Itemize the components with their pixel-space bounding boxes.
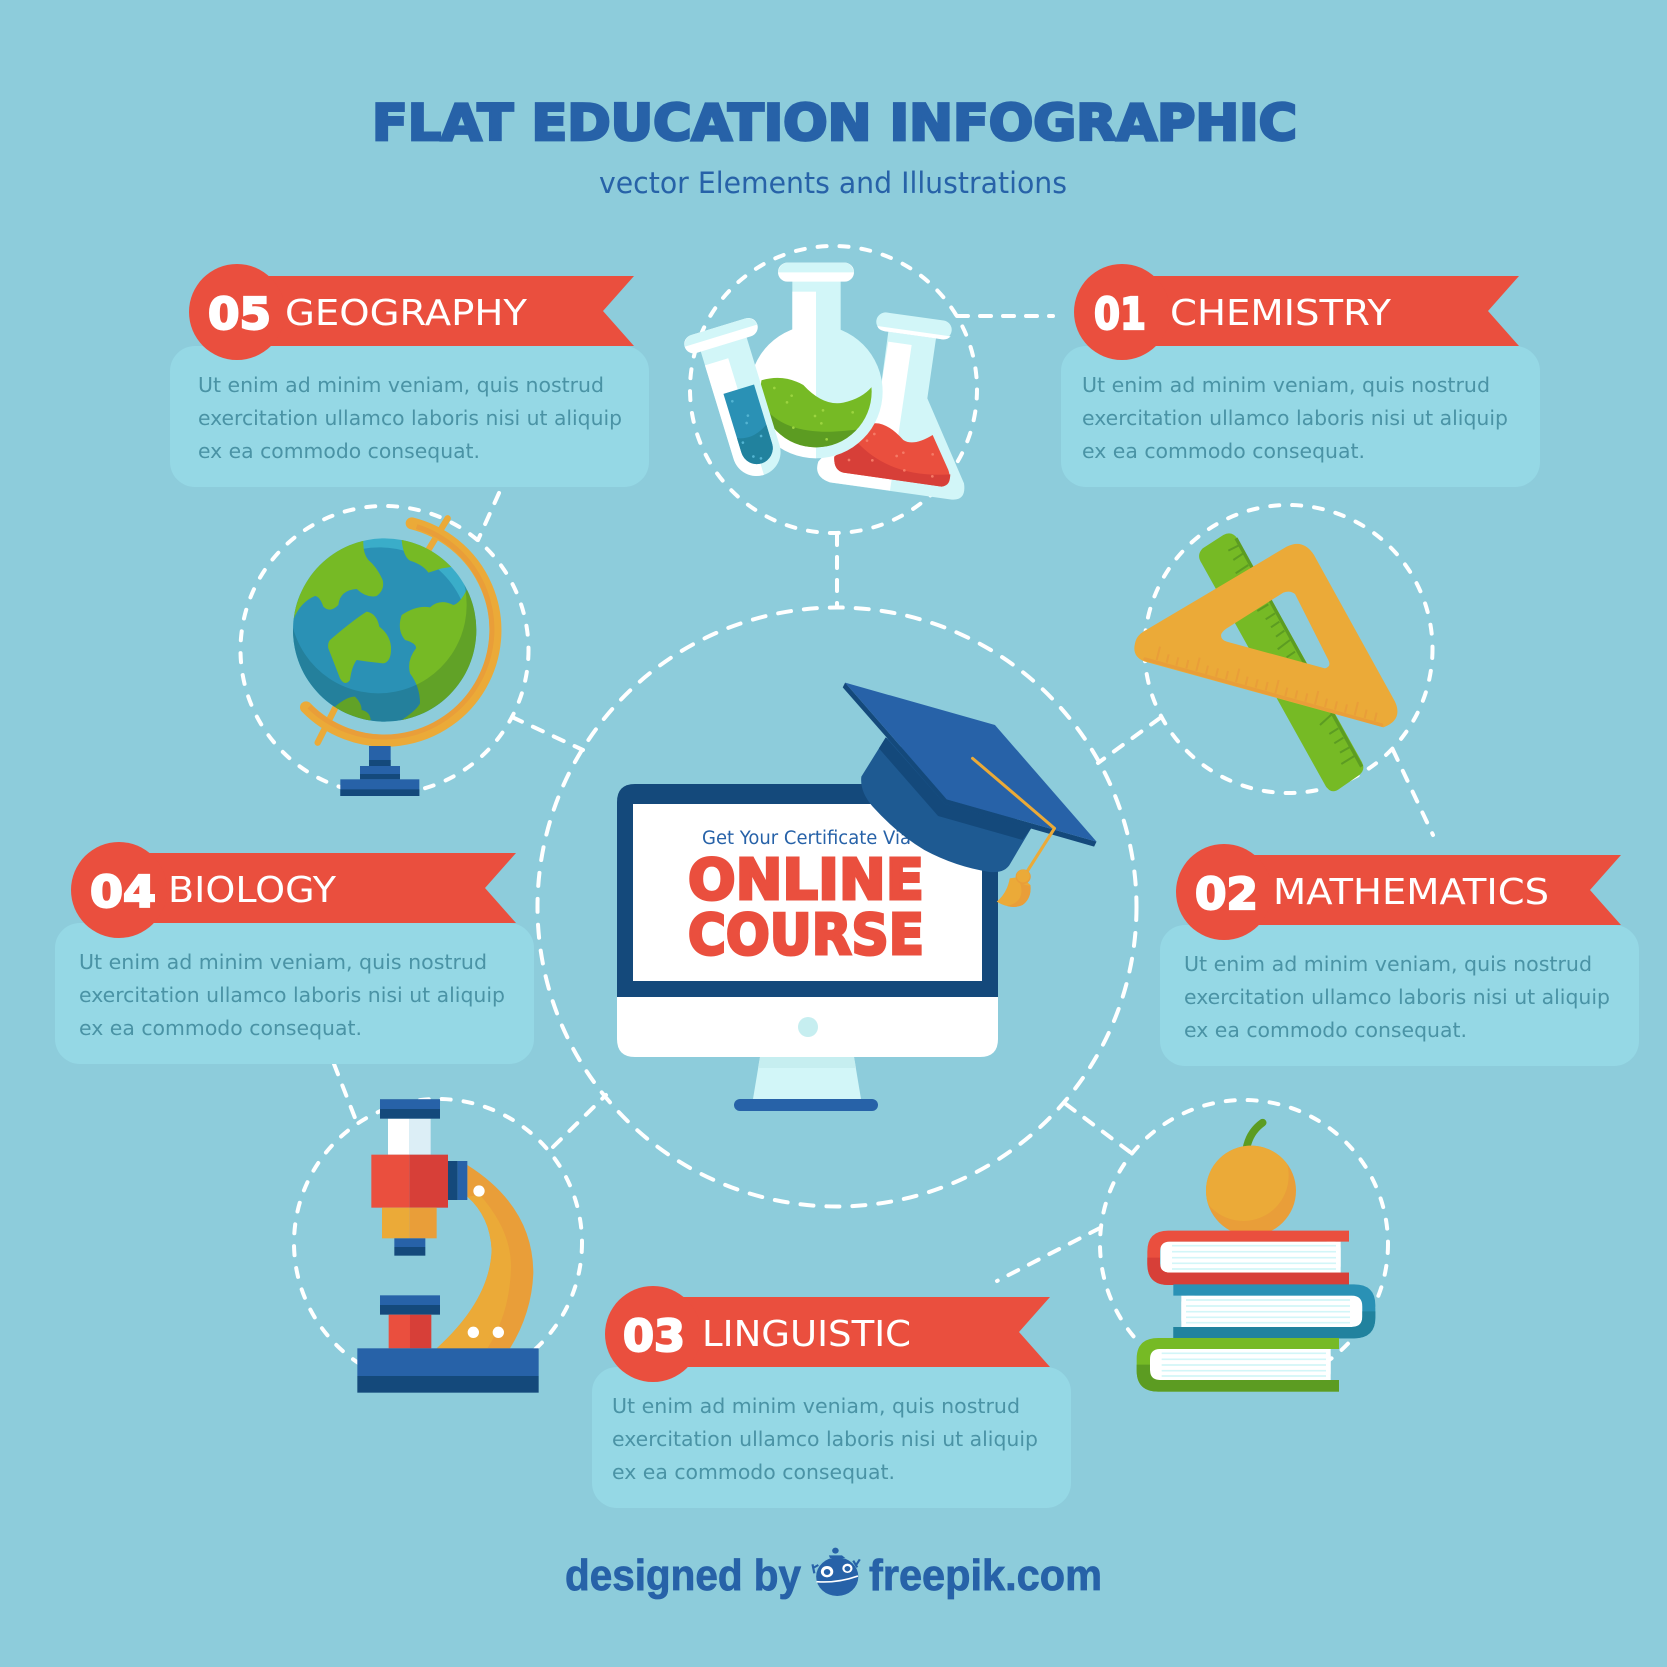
panel: 04 biology [55, 842, 534, 1064]
icon: ruler and set square [1134, 533, 1397, 791]
body text: exercitation ullamco laboris nisi ut aliquip [612, 1427, 1038, 1451]
number badge [71, 842, 167, 938]
chemistry dashed circle [690, 246, 977, 533]
test tube [682, 316, 800, 486]
globe sphere [293, 538, 476, 722]
number badge [189, 264, 285, 360]
heading: LINGUISTIC [702, 1314, 911, 1355]
number badge [605, 1286, 701, 1382]
icon: globe [270, 517, 495, 796]
number: 02 [1195, 869, 1258, 920]
round flask [749, 263, 883, 460]
body text: Ut enim ad minim veniam, quis nostrud [1082, 373, 1490, 397]
heading: CHEMISTRY [1170, 293, 1392, 334]
subtitle: vector Elements and Illustrations [599, 166, 1067, 200]
description card [55, 923, 534, 1064]
body text: ex ea commodo consequat. [198, 439, 480, 463]
linguistic dashed circle [1100, 1100, 1388, 1388]
heading: GEOGRAPHY [285, 293, 528, 334]
ribbon [653, 1297, 1050, 1367]
screen headline line 2: COURSE [688, 903, 924, 968]
microscope eyepiece [380, 1099, 440, 1155]
number: 04 [90, 867, 156, 918]
body text: exercitation ullamco laboris nisi ut aliquip [79, 983, 505, 1007]
number: 05 [208, 289, 271, 340]
globe axis [318, 518, 448, 743]
panel: 03 linguistic [592, 1286, 1071, 1508]
microscope body [371, 1155, 467, 1256]
icon: books and apple [1137, 1123, 1375, 1392]
description card [1160, 925, 1639, 1066]
monitor chin [617, 997, 998, 1057]
ribbon [237, 276, 634, 346]
monitor frame [617, 784, 998, 997]
body text [1184, 952, 1610, 1042]
monitor [617, 784, 998, 1111]
footer credit [565, 1548, 1102, 1600]
number: 03 [623, 1311, 685, 1362]
cap skull [861, 737, 1031, 872]
body text: Ut enim ad minim veniam, quis nostrud [198, 373, 604, 397]
screen small text: Get Your Certificate Via [702, 828, 911, 849]
ribbon [1224, 855, 1621, 925]
number badge [1074, 264, 1170, 360]
number badge [1176, 844, 1272, 940]
body text [612, 1394, 1038, 1484]
green ruler [1199, 533, 1363, 791]
geography dashed circle [240, 506, 528, 794]
icon: freepik mascot [813, 1548, 860, 1596]
body text [79, 950, 505, 1040]
title: FLAT EDUCATION INFOGRAPHIC [372, 94, 1297, 152]
ribbon [1122, 276, 1519, 346]
panel: 05 geography [170, 264, 649, 487]
body text [198, 373, 622, 463]
body text: exercitation ullamco laboris nisi ut aliquip [1184, 985, 1610, 1009]
icon: chemistry flasks [682, 263, 964, 500]
body text [1082, 373, 1508, 463]
body text: Ut enim ad minim veniam, quis nostrud [612, 1394, 1020, 1418]
ribbon [119, 853, 516, 923]
blue book [1173, 1284, 1375, 1338]
monitor stand [753, 1057, 861, 1099]
cap board [843, 683, 1097, 847]
heading: BIOLOGY [168, 870, 337, 911]
monitor button [798, 1017, 818, 1037]
cap tassel [973, 758, 1055, 907]
globe ring [306, 523, 495, 741]
green book [1137, 1338, 1339, 1392]
credit text left: designed by [565, 1551, 801, 1600]
body text: ex ea commodo consequat. [612, 1460, 895, 1484]
icon: graduation cap [843, 683, 1097, 907]
dashed connectors [334, 316, 1433, 1281]
monitor screen [633, 804, 982, 981]
globe stand [340, 746, 419, 796]
body text: Ut enim ad minim veniam, quis nostrud [79, 950, 487, 974]
apple [1198, 1123, 1296, 1236]
body text: exercitation ullamco laboris nisi ut aliquip [1082, 406, 1508, 430]
body text: exercitation ullamco laboris nisi ut aliquip [198, 406, 622, 430]
panel: 01 chemistry [1061, 264, 1540, 487]
description card [170, 346, 649, 487]
description card [592, 1367, 1071, 1508]
credit text right: freepik.com [869, 1551, 1102, 1600]
description card [1061, 346, 1540, 487]
conical flask [817, 311, 964, 500]
mathematics dashed circle [1144, 505, 1432, 793]
orange set square [1134, 544, 1397, 727]
body text: ex ea commodo consequat. [79, 1016, 362, 1040]
central dashed circle [538, 608, 1136, 1206]
microscope arm [437, 1165, 533, 1348]
body text: ex ea commodo consequat. [1184, 1018, 1467, 1042]
biology dashed circle [294, 1099, 582, 1387]
panel: 02 mathematics [1160, 844, 1639, 1066]
icon: microscope [357, 1099, 539, 1393]
cap shadow band [879, 737, 1031, 840]
heading: MATHEMATICS [1273, 872, 1549, 913]
screen headline: ONLINE [688, 848, 924, 913]
red book [1147, 1231, 1349, 1285]
body text: Ut enim ad minim veniam, quis nostrud [1184, 952, 1592, 976]
microscope stage and base [357, 1295, 539, 1393]
number: 01 [1094, 289, 1146, 340]
body text: ex ea commodo consequat. [1082, 439, 1365, 463]
